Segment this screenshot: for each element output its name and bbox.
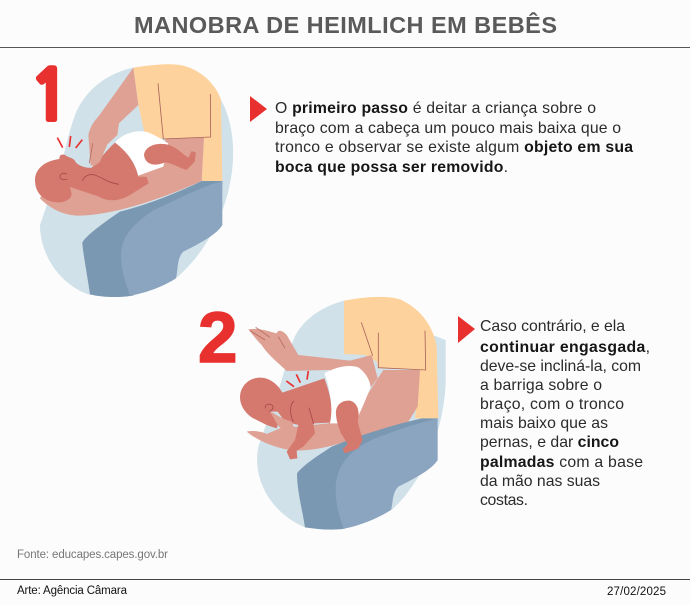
arrow 2 bbox=[458, 316, 475, 343]
line 8: palmadas com a base bbox=[480, 454, 643, 471]
thigh dark bbox=[82, 181, 222, 297]
line 2: braço com a cabeça um pouco mais baixa que o bbox=[275, 120, 621, 137]
number 2: 2 bbox=[198, 299, 238, 378]
line 7: pernas, e dar cinco bbox=[480, 434, 619, 451]
line 4: boca que possa ser removido. bbox=[275, 159, 508, 176]
title: MANOBRA DE HEIMLICH EM BEBÊS bbox=[134, 11, 557, 38]
finger lines bbox=[250, 327, 285, 348]
baby leg bbox=[144, 144, 196, 170]
panel: step 1 illustration bbox=[35, 64, 233, 297]
line 10: costas. bbox=[480, 492, 528, 509]
number 1: 1 bbox=[29, 63, 71, 131]
mother upper arm and hand bbox=[88, 68, 138, 166]
mother shirt bbox=[133, 64, 222, 181]
source note: Fonte: educapes.capes.gov.br bbox=[17, 549, 168, 561]
mother lower arm bbox=[40, 138, 204, 216]
arrow 1 bbox=[250, 96, 267, 122]
baby leg bbox=[336, 401, 363, 453]
line 2: continuar engasgada, bbox=[480, 339, 650, 356]
mother lower arm and hand bbox=[247, 370, 420, 451]
thigh light bbox=[121, 181, 222, 296]
baby bbox=[240, 378, 363, 459]
shirt pocket lines bbox=[158, 83, 211, 139]
finger line bbox=[89, 143, 93, 163]
baby body and head bbox=[35, 143, 149, 202]
line 6: mais baixo que as bbox=[480, 415, 608, 432]
text block: step 2 bbox=[480, 318, 650, 509]
line 9: da mão nas suas bbox=[480, 473, 600, 490]
background blob bbox=[257, 301, 446, 527]
line 1: Caso contrário, e ela bbox=[480, 318, 625, 335]
thigh dark bbox=[297, 418, 438, 530]
text block: step 1 bbox=[275, 100, 633, 176]
diaper bbox=[324, 366, 371, 423]
thigh light bbox=[336, 418, 438, 529]
panel: step 2 illustration bbox=[240, 297, 446, 530]
mother thumb bbox=[270, 412, 295, 430]
background blob bbox=[40, 68, 233, 295]
diaper bbox=[115, 131, 168, 176]
credit: Arte: Agência Câmara bbox=[17, 585, 128, 597]
baby head and body bbox=[240, 378, 331, 459]
date: 27/02/2025 bbox=[607, 586, 666, 598]
line 3: tronco e observar se existe algum objeto em sua bbox=[275, 139, 633, 156]
line 4: a barriga sobre o bbox=[480, 377, 602, 394]
baby ear and body lines bbox=[265, 401, 314, 424]
mother raised arm and hand bbox=[248, 329, 378, 388]
baby bbox=[35, 143, 196, 202]
baby ear and body lines bbox=[60, 173, 119, 184]
line 1: O primeiro passo é deitar a criança sobre o bbox=[275, 100, 596, 117]
line 5: braço, com o tronco bbox=[480, 396, 624, 413]
mother shirt bbox=[344, 297, 438, 418]
alert marks bbox=[57, 136, 82, 148]
shirt and arm lines bbox=[361, 322, 426, 370]
line 3: deve-se incliná-la, com bbox=[480, 358, 641, 375]
alert marks bbox=[286, 371, 308, 387]
